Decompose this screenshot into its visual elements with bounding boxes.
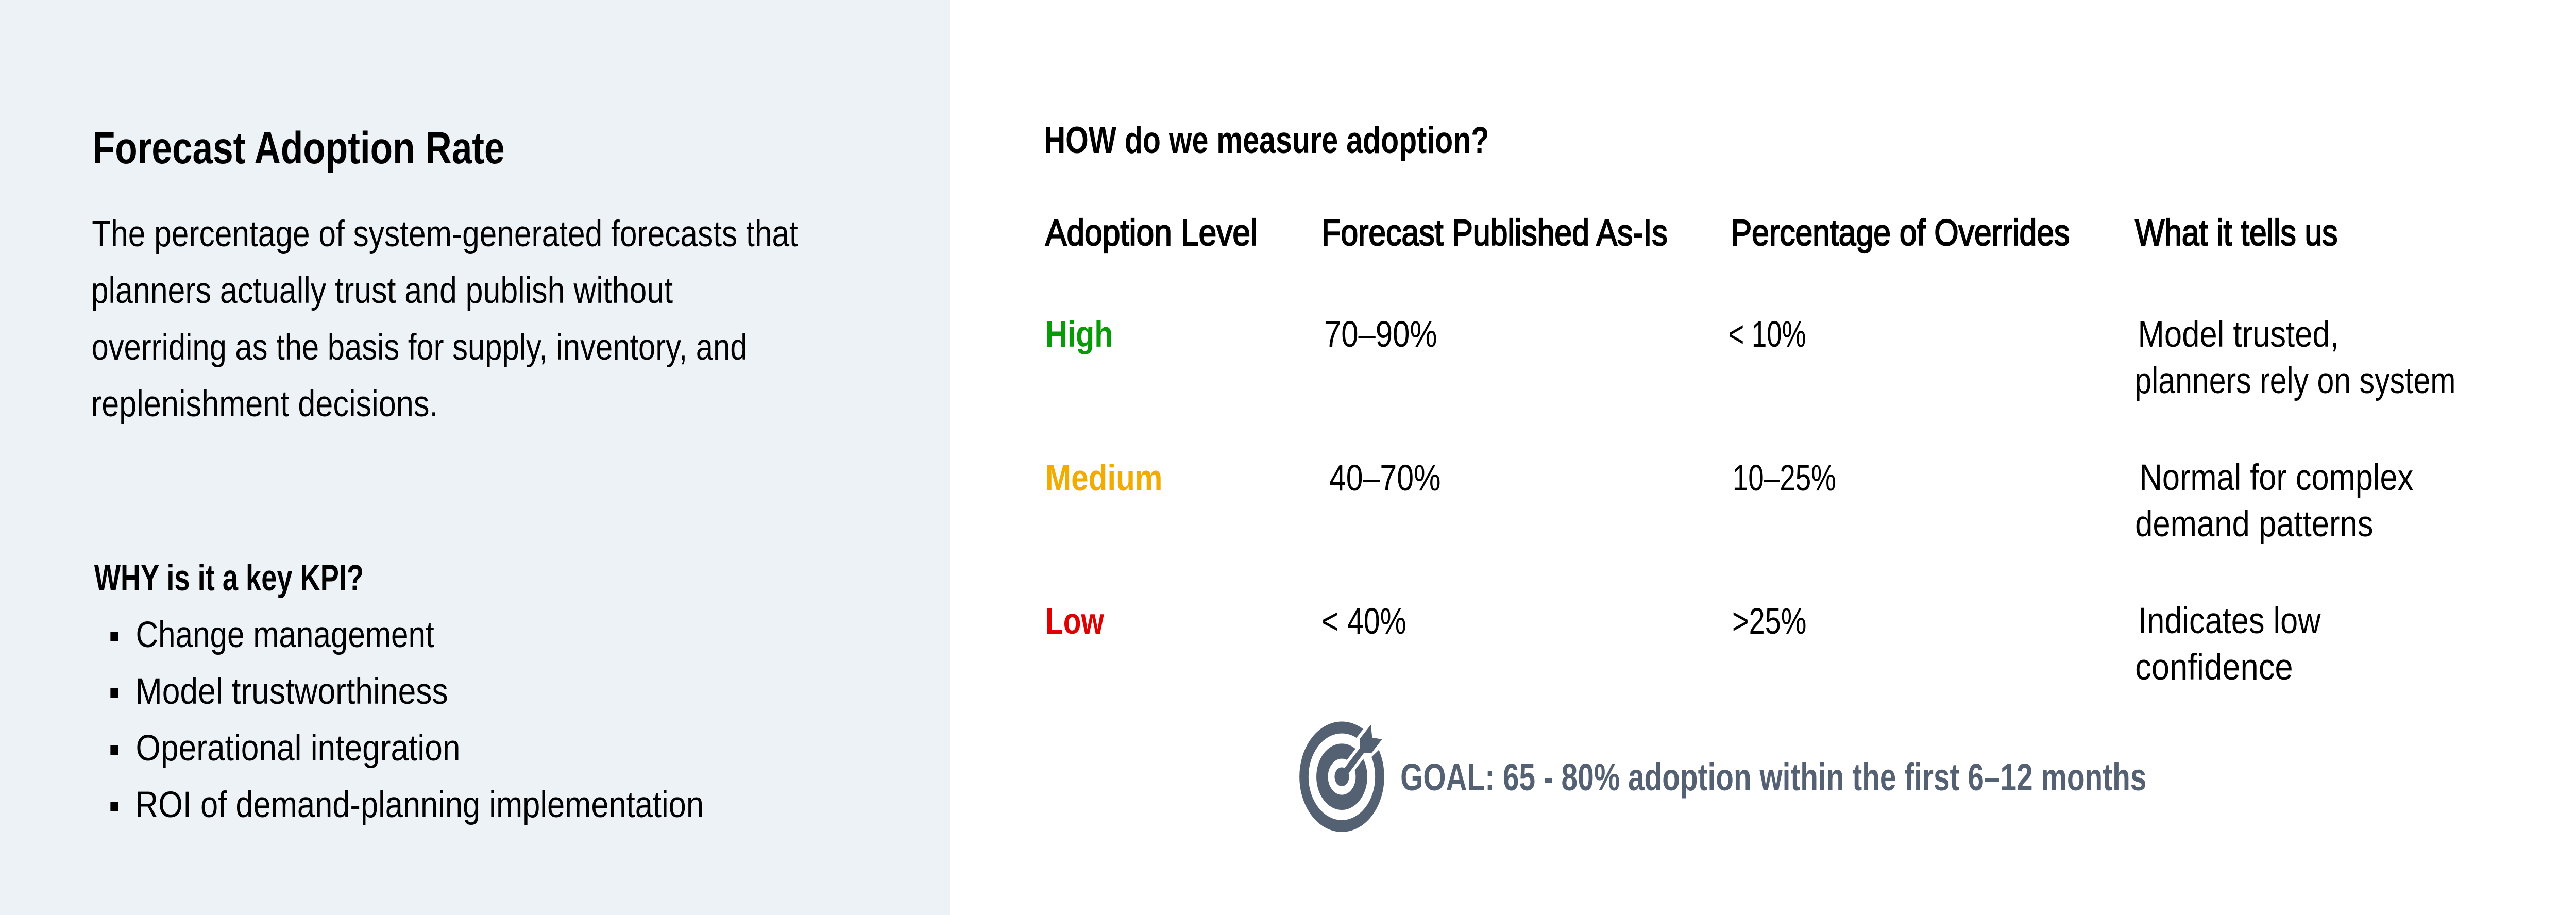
table row: low: >25%	[1732, 601, 1806, 642]
table row: high: planners rely on system	[2134, 361, 2455, 401]
section heading: how: HOW do we measure adoption?	[1044, 119, 1489, 161]
why bullet list: Operational integration	[136, 728, 461, 769]
table header row: Forecast Published As-Is	[1321, 213, 1668, 253]
table header row: What it tells us	[2135, 213, 2337, 253]
definition text block: replenishment decisions.	[91, 384, 438, 425]
table row: medium: Medium	[1045, 458, 1162, 499]
icon: target with arrow	[1304, 724, 1385, 826]
title: Forecast Adoption Rate	[93, 124, 505, 173]
table row: high	[1045, 314, 2455, 401]
why bullet list: Change management	[136, 615, 434, 655]
table row: high: High	[1045, 314, 1113, 355]
table header row: Percentage of Overrides	[1731, 213, 2070, 253]
table row: high: Model trusted,	[2138, 314, 2339, 355]
definition text block	[91, 214, 798, 425]
table row: low	[1045, 601, 2321, 688]
callout: goal	[1304, 724, 2146, 826]
table row: medium: Normal for complex	[2140, 458, 2413, 498]
why bullet list: Model trustworthiness	[135, 671, 448, 712]
table row: medium: demand patterns	[2135, 504, 2374, 545]
why heading: WHY is it a key KPI?	[94, 558, 364, 599]
table row: high: 70–90%	[1324, 314, 1437, 355]
panel: definition and why	[0, 0, 950, 915]
table row: low: < 40%	[1321, 601, 1406, 642]
table header row: Adoption Level	[1045, 213, 1258, 253]
goal text: GOAL: 65 - 80% adoption within the first 6–12 months	[1400, 756, 2146, 799]
definition text block: planners actually trust and publish without	[91, 270, 673, 311]
why bullet list: ROI of demand-planning implementation	[135, 785, 704, 825]
table row: medium: 40–70%	[1329, 458, 1441, 499]
table row: low: Low	[1045, 601, 1104, 642]
why bullet list	[110, 615, 704, 825]
table row: low: Indicates low	[2138, 601, 2321, 641]
definition text block: The percentage of system-generated forecasts that	[92, 214, 798, 255]
table row: low: confidence	[2135, 647, 2293, 688]
panel background	[0, 0, 950, 915]
table header row	[1045, 213, 2337, 253]
table row: medium: 10–25%	[1733, 458, 1836, 499]
definition text block: overriding as the basis for supply, inventory, and	[91, 327, 748, 368]
table row: high: < 10%	[1728, 314, 1806, 355]
table row: medium	[1045, 458, 2413, 545]
